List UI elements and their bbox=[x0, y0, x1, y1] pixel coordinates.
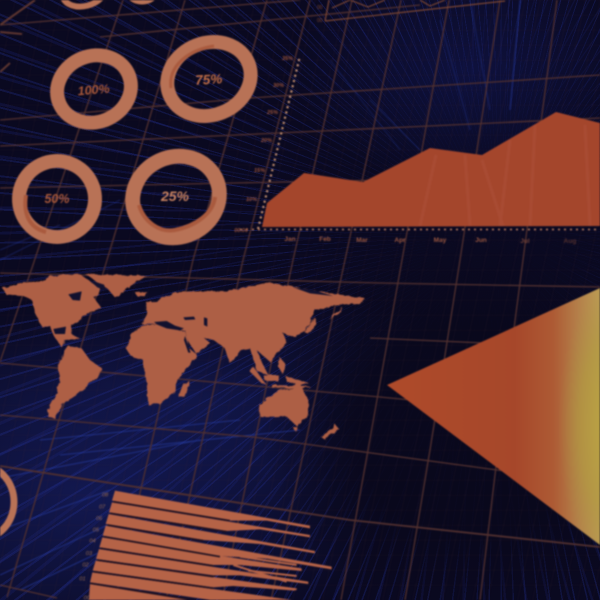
bar tails bbox=[213, 557, 297, 589]
madagascar bbox=[178, 382, 190, 397]
bars bbox=[88, 491, 332, 600]
bar separators bbox=[91, 502, 230, 600]
y axis labels: 10% bbox=[246, 197, 257, 203]
mediterranean bbox=[154, 321, 184, 330]
large triangle bbox=[387, 288, 600, 545]
ring gauge 100% bbox=[47, 44, 141, 134]
southeast asia islands bbox=[250, 367, 267, 385]
small line chart top bbox=[317, 0, 505, 24]
africa bbox=[126, 323, 197, 405]
ring gauge 75%: 75% bbox=[195, 71, 223, 88]
x axis labels: May bbox=[434, 237, 447, 244]
y axis dots bbox=[258, 56, 300, 229]
bar chart bbox=[79, 491, 332, 600]
x axis labels: Mar bbox=[356, 237, 368, 244]
y axis labels: 15% bbox=[254, 168, 265, 174]
bar labels bbox=[79, 493, 109, 600]
y axis labels bbox=[234, 56, 293, 234]
x axis labels: Aug bbox=[564, 238, 576, 245]
arctic russia gaps bbox=[293, 287, 333, 296]
small line chart top: 00 bbox=[317, 18, 323, 24]
bar labels: 08 bbox=[102, 493, 109, 499]
y axis labels: 00.00 bbox=[234, 228, 248, 234]
bar labels: 06 bbox=[96, 516, 103, 522]
partial ring top left bbox=[59, 0, 109, 11]
bar labels: 03 bbox=[86, 551, 93, 557]
map sea gaps bbox=[53, 280, 333, 353]
north america bbox=[3, 274, 102, 347]
y axis labels: 25% bbox=[266, 110, 278, 116]
y axis labels: 35% bbox=[282, 56, 293, 62]
x axis labels: Jan bbox=[284, 236, 296, 243]
x axis labels: Apr bbox=[394, 237, 406, 244]
australia bbox=[259, 381, 309, 427]
area fill bbox=[262, 112, 600, 227]
bar labels: 01 bbox=[79, 577, 86, 583]
partial ring top center bbox=[128, 0, 156, 2]
hudson bay bbox=[68, 291, 82, 301]
gulf of mexico bbox=[53, 327, 66, 334]
y axis labels: 30% bbox=[273, 83, 284, 89]
ring gauge 50%: 50% bbox=[44, 192, 70, 206]
ring gauge 25% bbox=[119, 142, 233, 252]
area chart bbox=[234, 56, 600, 245]
bar labels: 02 bbox=[82, 563, 90, 569]
x axis labels: Feb bbox=[319, 236, 331, 243]
red sea bbox=[184, 336, 191, 353]
bar labels: 05 bbox=[93, 528, 100, 534]
tasmania bbox=[293, 428, 298, 432]
iceland bbox=[135, 292, 147, 296]
greenland bbox=[85, 274, 147, 297]
small line chart top: 00 bbox=[317, 5, 323, 11]
top-left chart fragments bbox=[0, 0, 35, 72]
eurasia bbox=[142, 283, 365, 375]
japan bbox=[328, 307, 343, 318]
bar labels: 04 bbox=[89, 539, 96, 545]
x axis labels: Jun bbox=[475, 237, 487, 244]
world map bbox=[3, 274, 365, 439]
black sea bbox=[183, 317, 195, 320]
area streaks bbox=[420, 125, 590, 226]
ring gauge 25%: 25% bbox=[160, 188, 190, 204]
new zealand bbox=[321, 423, 339, 439]
britain bbox=[146, 302, 156, 313]
x axis labels bbox=[284, 236, 576, 245]
canadian arctic gap bbox=[89, 280, 106, 291]
bar labels: 07 bbox=[99, 504, 106, 510]
caspian bbox=[204, 317, 207, 327]
y axis labels: 20% bbox=[260, 138, 272, 144]
x axis dots bbox=[240, 228, 600, 230]
x axis labels: Jul bbox=[520, 238, 530, 245]
ring gauge 75% bbox=[156, 30, 262, 128]
partial ring left edge bbox=[0, 464, 14, 540]
ring gauge 50% bbox=[7, 149, 107, 249]
ring gauge 100%: 100% bbox=[77, 82, 110, 98]
south america bbox=[48, 346, 102, 418]
